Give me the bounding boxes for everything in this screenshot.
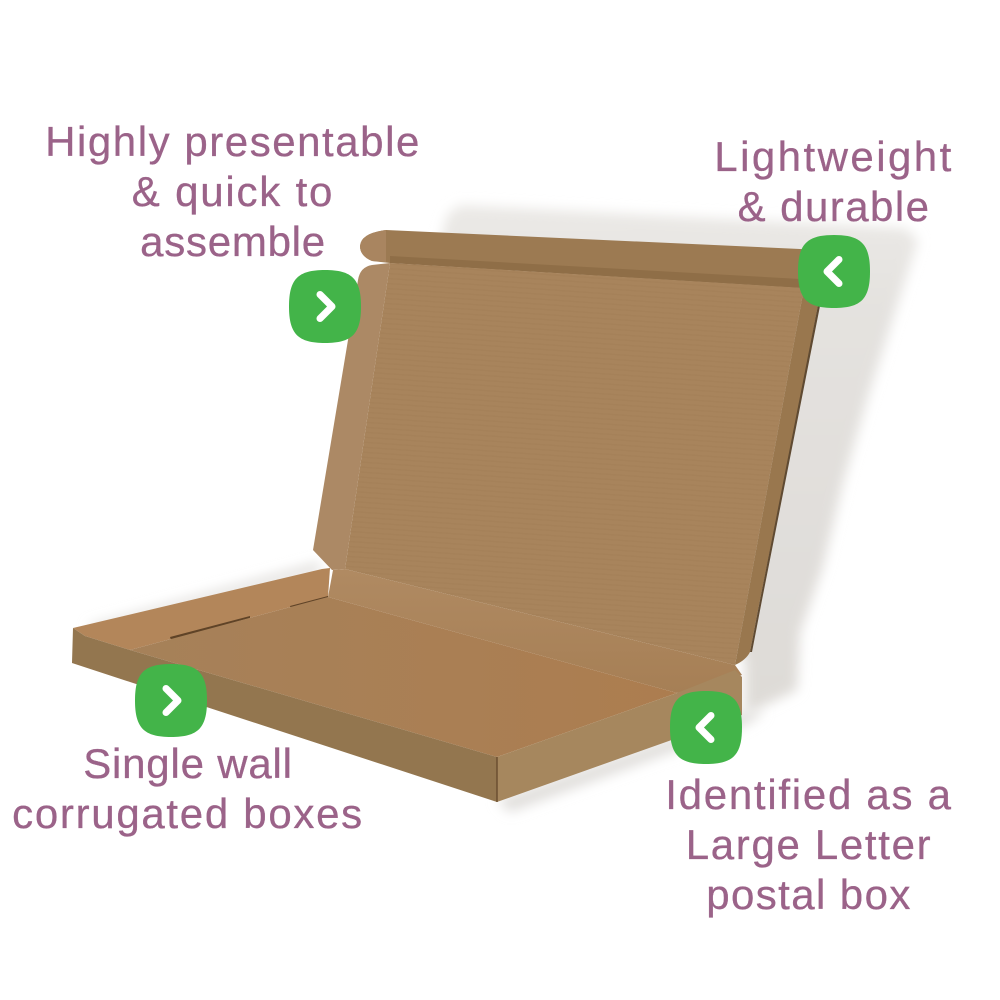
icon: arrow left bottom (670, 691, 742, 764)
icon: arrow right bottom (135, 664, 207, 737)
box tray left inner wall (73, 568, 330, 650)
label: lightweight: Lightweight (714, 133, 954, 180)
label: single wall (12, 740, 364, 837)
icon: arrow right top (289, 270, 361, 343)
box lid left flap (313, 263, 390, 570)
icon: arrow left top (798, 235, 870, 308)
box tray right wall (497, 670, 742, 802)
box lid right flap (735, 288, 818, 665)
label: presentable: & quick to (132, 168, 334, 215)
tray shadows (90, 562, 765, 812)
label: single wall: Single wall (83, 740, 293, 787)
label: large letter: Large Letter (686, 821, 932, 868)
label: lightweight (714, 133, 954, 230)
box tray front wall (72, 628, 497, 802)
box lid top flap (360, 230, 818, 289)
label: presentable (45, 118, 421, 265)
label: large letter (665, 771, 953, 918)
box hinge flap (328, 569, 742, 693)
box lid inside (345, 263, 804, 665)
box corner seam (496, 757, 498, 802)
label: presentable: Highly presentable (45, 118, 421, 165)
label: lightweight: & durable (738, 183, 930, 230)
label: large letter: postal box (706, 871, 912, 918)
label: large letter: Identified as a (665, 771, 953, 818)
box lid right edge (750, 305, 820, 652)
label: single wall: corrugated boxes (12, 790, 364, 837)
box shadow (440, 205, 918, 715)
label: presentable: assemble (140, 218, 326, 265)
wall slots (170, 596, 328, 640)
box tray floor (130, 597, 677, 757)
